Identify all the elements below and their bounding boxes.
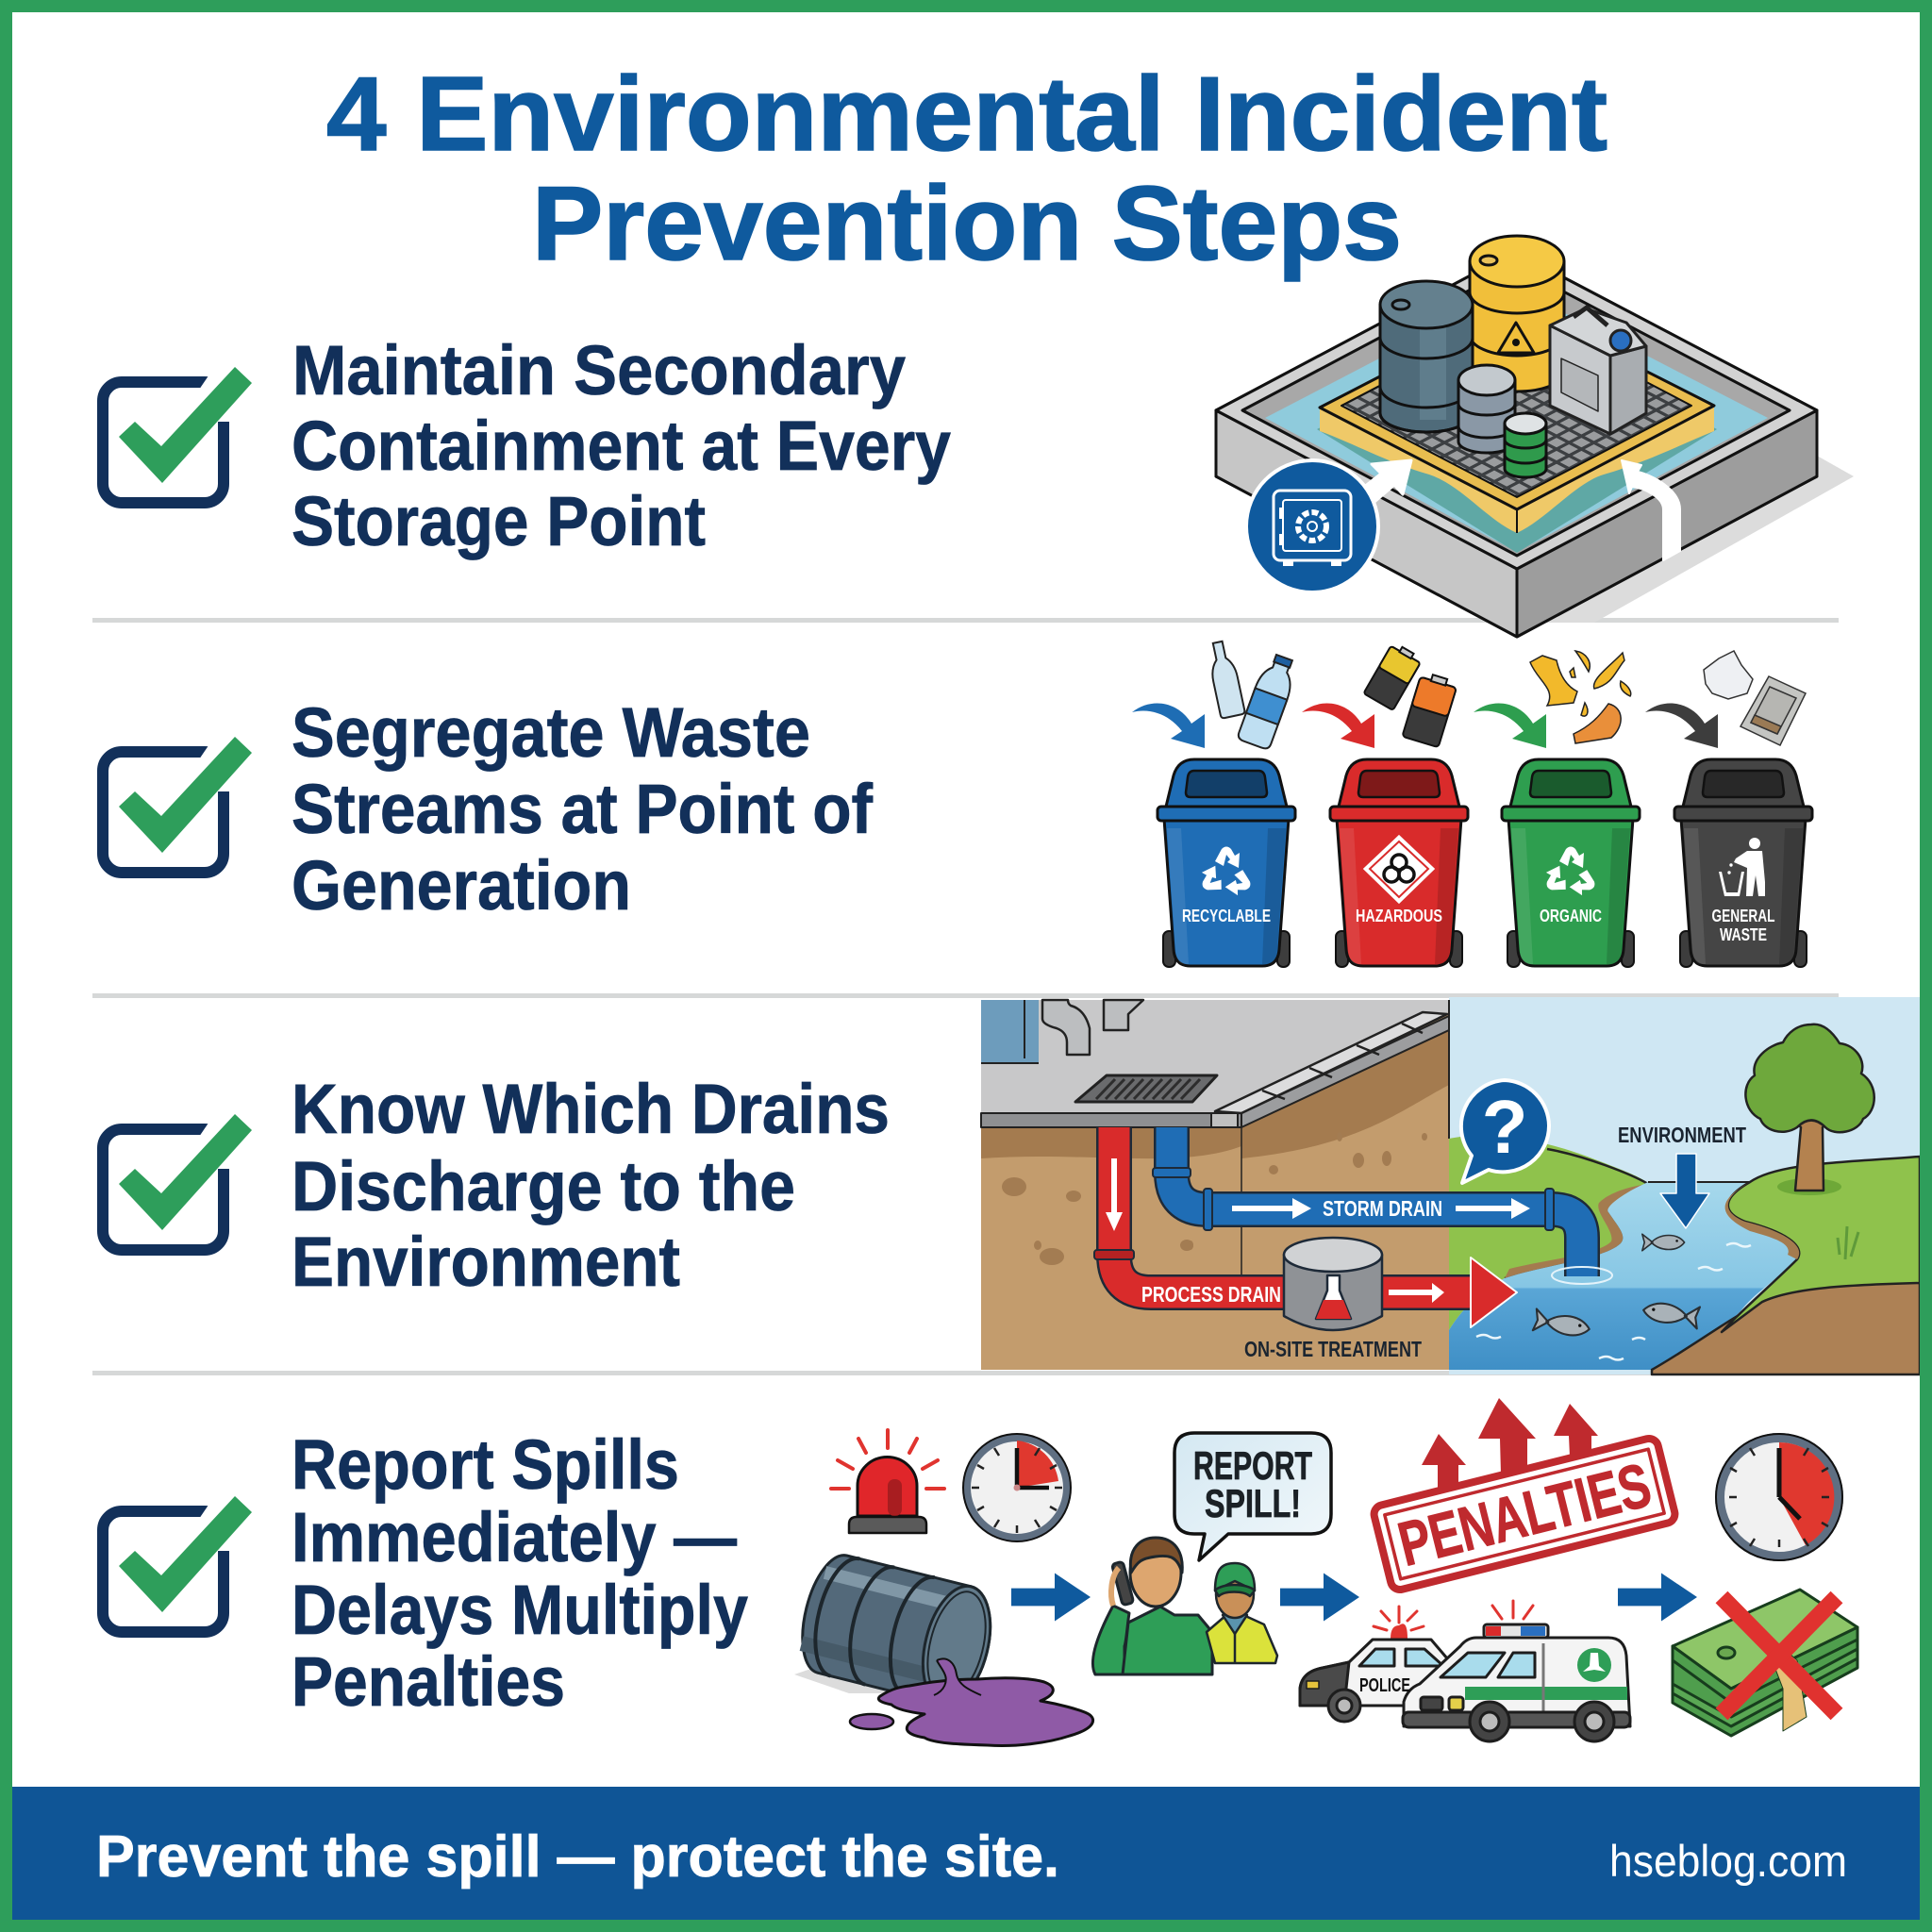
icon: safe badge bbox=[1244, 458, 1380, 594]
batteries bbox=[1363, 641, 1458, 747]
dividers bbox=[92, 618, 1839, 1375]
step 1: text: Storage Point bbox=[291, 482, 706, 560]
step 2: text: Streams at Point of bbox=[291, 770, 873, 848]
step 3: text bbox=[291, 1070, 890, 1301]
icon: clock, short delay bbox=[963, 1434, 1071, 1541]
step 4: text: Report Spills bbox=[291, 1425, 679, 1504]
step 4: check icon bbox=[103, 1492, 259, 1632]
shadow bbox=[1528, 456, 1854, 623]
step 4: text: Immediately — bbox=[291, 1498, 737, 1576]
step 3: text: Environment bbox=[291, 1223, 680, 1301]
storm drain pipe bbox=[1153, 1127, 1612, 1284]
speech bubble: SPILL! bbox=[1205, 1481, 1301, 1525]
jerry can bbox=[1550, 308, 1646, 434]
bin: general waste bbox=[1674, 759, 1812, 967]
spill tray bbox=[1320, 306, 1714, 533]
icon: question bubble: ? bbox=[1482, 1085, 1527, 1169]
step 1: text: Maintain Secondary bbox=[292, 331, 906, 409]
soil bbox=[981, 1000, 1449, 1370]
ripples bbox=[1476, 1243, 1751, 1360]
step 2: text: Segregate Waste bbox=[291, 693, 810, 772]
footer band bbox=[12, 1787, 1920, 1920]
penalties stamp bbox=[1372, 1437, 1677, 1591]
panel: secondary containment illustration bbox=[1216, 236, 1854, 637]
bin: general waste: WASTE bbox=[1720, 925, 1767, 944]
step 2: text bbox=[291, 693, 873, 924]
bin: organic: ORGANIC bbox=[1540, 907, 1602, 925]
step 1: text: Containment at Every bbox=[291, 407, 951, 485]
icon: question bubble bbox=[1461, 1080, 1549, 1183]
icon: clock, long delay bbox=[1716, 1434, 1842, 1560]
panel: waste bins illustration bbox=[1132, 640, 1812, 967]
icon: cash stack crossed out bbox=[1673, 1590, 1857, 1736]
bin: recyclable: RECYCLABLE bbox=[1182, 907, 1271, 925]
police car bbox=[1300, 1640, 1453, 1706]
bund outer walls bbox=[1216, 252, 1817, 637]
process drain pipe: PROCESS DRAIN bbox=[1141, 1282, 1281, 1307]
drum: dark bbox=[1380, 281, 1473, 432]
icon: tipped barrel bbox=[791, 1549, 1093, 1746]
title: 4 Environmental Incident bbox=[326, 56, 1607, 173]
fish bbox=[1533, 1234, 1700, 1340]
bin: recyclable bbox=[1158, 759, 1295, 967]
step 2: check icon bbox=[103, 733, 259, 873]
organic scraps bbox=[1530, 651, 1631, 743]
arrow 1 bbox=[1011, 1574, 1091, 1621]
bin: organic bbox=[1502, 759, 1640, 967]
step 3: text: Discharge to the bbox=[291, 1147, 795, 1225]
footer site name: hseblog.com bbox=[1609, 1836, 1847, 1886]
blue down arrow bbox=[1660, 1154, 1709, 1228]
footer slogan: Prevent the spill — protect the site. bbox=[96, 1824, 1059, 1890]
bottles bbox=[1206, 640, 1300, 750]
arrow 2 bbox=[1280, 1574, 1359, 1621]
speech bubble bbox=[1174, 1433, 1331, 1560]
icon: worker in hi-vis vest bbox=[1207, 1563, 1277, 1663]
panel: spill reporting sequence bbox=[791, 1398, 1857, 1746]
step 3: text: Know Which Drains bbox=[291, 1070, 890, 1148]
grate bbox=[1075, 1075, 1217, 1102]
step 3: check icon bbox=[103, 1110, 259, 1250]
far bank bbox=[1652, 1281, 1920, 1374]
icon: siren bbox=[831, 1430, 944, 1533]
process drain pipe bbox=[1094, 1127, 1517, 1327]
drum: yellow bbox=[1470, 236, 1564, 391]
bin: general waste: GENERAL bbox=[1711, 907, 1775, 925]
white arrows bbox=[1355, 460, 1411, 508]
panel: drains cross-section illustration bbox=[981, 997, 1920, 1374]
title bbox=[326, 56, 1607, 282]
purple spill bbox=[878, 1678, 1093, 1746]
building and pipes bbox=[981, 1000, 1039, 1063]
bin: hazardous bbox=[1330, 759, 1468, 967]
van bbox=[1404, 1638, 1630, 1726]
tree bbox=[1745, 1024, 1874, 1195]
paper and wrapper bbox=[1704, 651, 1806, 745]
step 2: text: Generation bbox=[291, 846, 631, 924]
step 1: text bbox=[291, 331, 951, 560]
arrow 3 bbox=[1618, 1574, 1697, 1621]
drum: small grey bbox=[1458, 365, 1515, 453]
concrete slab bbox=[981, 1000, 1449, 1113]
environment label: ENVIRONMENT bbox=[1618, 1123, 1746, 1147]
on-site treatment label: ON-SITE TREATMENT bbox=[1244, 1337, 1422, 1361]
right scene bbox=[1449, 997, 1920, 1374]
water bbox=[1265, 288, 1768, 552]
penalty arrows bbox=[1422, 1398, 1598, 1492]
penalties stamp: PENALTIES bbox=[1391, 1449, 1657, 1579]
step 4: text bbox=[291, 1425, 748, 1721]
step 1: check icon bbox=[103, 363, 259, 503]
title: Prevention Steps bbox=[532, 165, 1402, 282]
icon: reporter on phone bbox=[1092, 1538, 1212, 1674]
on-site treatment tank bbox=[1284, 1238, 1382, 1330]
river bbox=[1449, 1182, 1799, 1370]
speech bubble: REPORT bbox=[1193, 1443, 1312, 1488]
step 4: text: Delays Multiply bbox=[291, 1571, 748, 1649]
bin: hazardous: HAZARDOUS bbox=[1356, 907, 1442, 925]
red cross bbox=[1722, 1597, 1837, 1714]
drum: small green bbox=[1505, 413, 1546, 477]
label: police: POLICE bbox=[1359, 1675, 1410, 1696]
icon: emergency vehicles bbox=[1300, 1601, 1630, 1741]
step 4: text: Penalties bbox=[291, 1642, 565, 1721]
arrows bbox=[1132, 704, 1718, 748]
storm drain pipe: STORM DRAIN bbox=[1323, 1196, 1442, 1221]
